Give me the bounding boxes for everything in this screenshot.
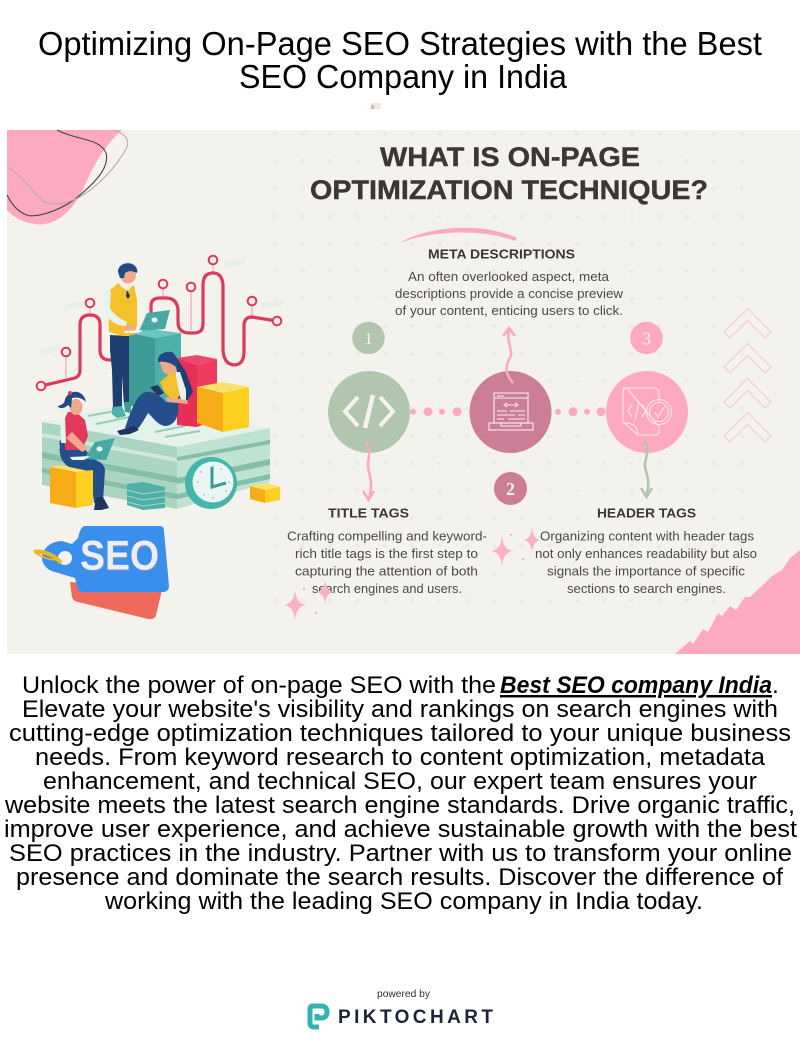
footer: powered by piktochart: PIKTOCHART — [338, 1007, 493, 1028]
body paragraph: cutting-edge optimization techniques tailored to your unique business — [9, 720, 791, 747]
decorative pink blob with outlines — [7, 130, 128, 224]
dotted connector right — [555, 407, 606, 416]
text block: header tags: Organizing content with header tags — [540, 530, 754, 544]
text block: title tags — [287, 506, 487, 596]
illustration: team with charts on stacked platform — [37, 256, 285, 510]
footer: powered by piktochart — [310, 989, 493, 1028]
stacked green platform — [42, 403, 270, 509]
yellow bar — [197, 382, 249, 432]
step badge 3: 3 — [642, 328, 651, 348]
text block: meta descriptions: descriptions provide a concise preview — [395, 287, 624, 301]
step badge 2: 2 — [506, 479, 515, 499]
heading: what is on-page optimization technique: OPTIMIZATION TECHNIQUE? — [310, 175, 708, 205]
arrow down to header tags — [641, 441, 652, 497]
icon: code brackets in green circle — [328, 371, 410, 453]
text block: header tags: HEADER TAGS — [597, 506, 696, 520]
text block: title tags: search engines and users. — [312, 582, 462, 596]
body paragraph: Elevate your website's visibility and rankings on search engines with — [22, 696, 778, 723]
text block: header tags: not only enhances readability but also — [535, 547, 757, 561]
sparkles — [284, 527, 541, 621]
footer: powered by piktochart: powered by — [377, 989, 430, 1000]
icon: SEO price tag — [34, 526, 169, 619]
body paragraph: improve user experience, and achieve sustainable growth with the best — [4, 816, 797, 843]
step badge 3 — [630, 322, 663, 354]
clock — [185, 457, 237, 509]
teal bar — [129, 329, 181, 415]
text block: meta descriptions — [395, 246, 624, 318]
body paragraph: SEO practices in the industry. Partner with us to transform your online — [9, 840, 792, 867]
body paragraph: enhancement, and technical SEO, our expert team ensures your — [43, 768, 757, 795]
icon: code document with check in pink circle — [606, 371, 688, 453]
tiny thumbnail image — [371, 103, 381, 109]
body paragraph — [4, 672, 797, 915]
text block: meta descriptions: An often overlooked aspect, meta — [408, 270, 609, 284]
chevrons — [724, 308, 771, 442]
text block: header tags: signals the importance of specific — [547, 564, 745, 578]
left woman with laptop — [58, 391, 115, 510]
brush stroke above meta descriptions — [400, 228, 517, 243]
body paragraph: . — [772, 672, 779, 699]
standing man with laptop — [104, 263, 170, 418]
title: SEO Company in India — [239, 59, 567, 96]
body paragraph: website meets the latest search engine standards. Drive organic traffic, — [4, 792, 795, 819]
text block: title tags: TITLE TAGS — [328, 506, 409, 520]
red bar — [177, 355, 217, 427]
icon: SEO price tag: SEO — [80, 532, 159, 578]
text block: meta descriptions: META DESCRIPTIONS — [428, 246, 575, 262]
icon: SEO price tag: SEO — [81, 533, 160, 580]
body paragraph: Best SEO company India — [500, 672, 772, 699]
title: Optimizing On-Page SEO Strategies with the Best — [38, 26, 763, 63]
red growth line with pins — [37, 256, 285, 390]
text block: meta descriptions: of your content, enticing users to click. — [395, 304, 623, 318]
step badge 1 — [352, 322, 385, 354]
body paragraph: Unlock the power of on-page SEO with the — [22, 672, 496, 699]
arrow down to title tags — [363, 443, 374, 500]
step badge 1: 1 — [364, 329, 373, 348]
teal paper stack — [127, 482, 165, 510]
icon: laptop in mauve circle — [470, 371, 552, 453]
seated woman with phone — [117, 352, 193, 435]
arrow up to meta descriptions — [503, 328, 515, 383]
step badge 2 — [494, 472, 527, 505]
yellow cube — [50, 465, 93, 508]
text block: header tags: sections to search engines. — [567, 582, 726, 596]
heading: what is on-page optimization technique — [310, 142, 708, 205]
panel: on-page optimization infographic — [7, 130, 800, 654]
body paragraph: working with the leading SEO company in India today. — [104, 888, 703, 915]
heading: what is on-page optimization technique: WHAT IS ON-PAGE — [380, 142, 640, 172]
dotted connector left — [410, 407, 462, 416]
text block: header tags — [535, 506, 757, 596]
text block: title tags: rich title tags is the first step to — [295, 547, 478, 561]
text block: title tags: capturing the attention of both — [295, 564, 478, 578]
decorative pink corner — [675, 550, 800, 654]
body paragraph: presence and dominate the search results. Discover the difference of — [16, 864, 783, 891]
text block: title tags: Crafting compelling and keyword- — [287, 530, 487, 544]
body paragraph: needs. From keyword research to content optimization, metadata — [35, 744, 765, 771]
icon: piktochart logo — [310, 1006, 327, 1027]
title — [38, 26, 763, 96]
small yellow cube — [250, 483, 280, 503]
